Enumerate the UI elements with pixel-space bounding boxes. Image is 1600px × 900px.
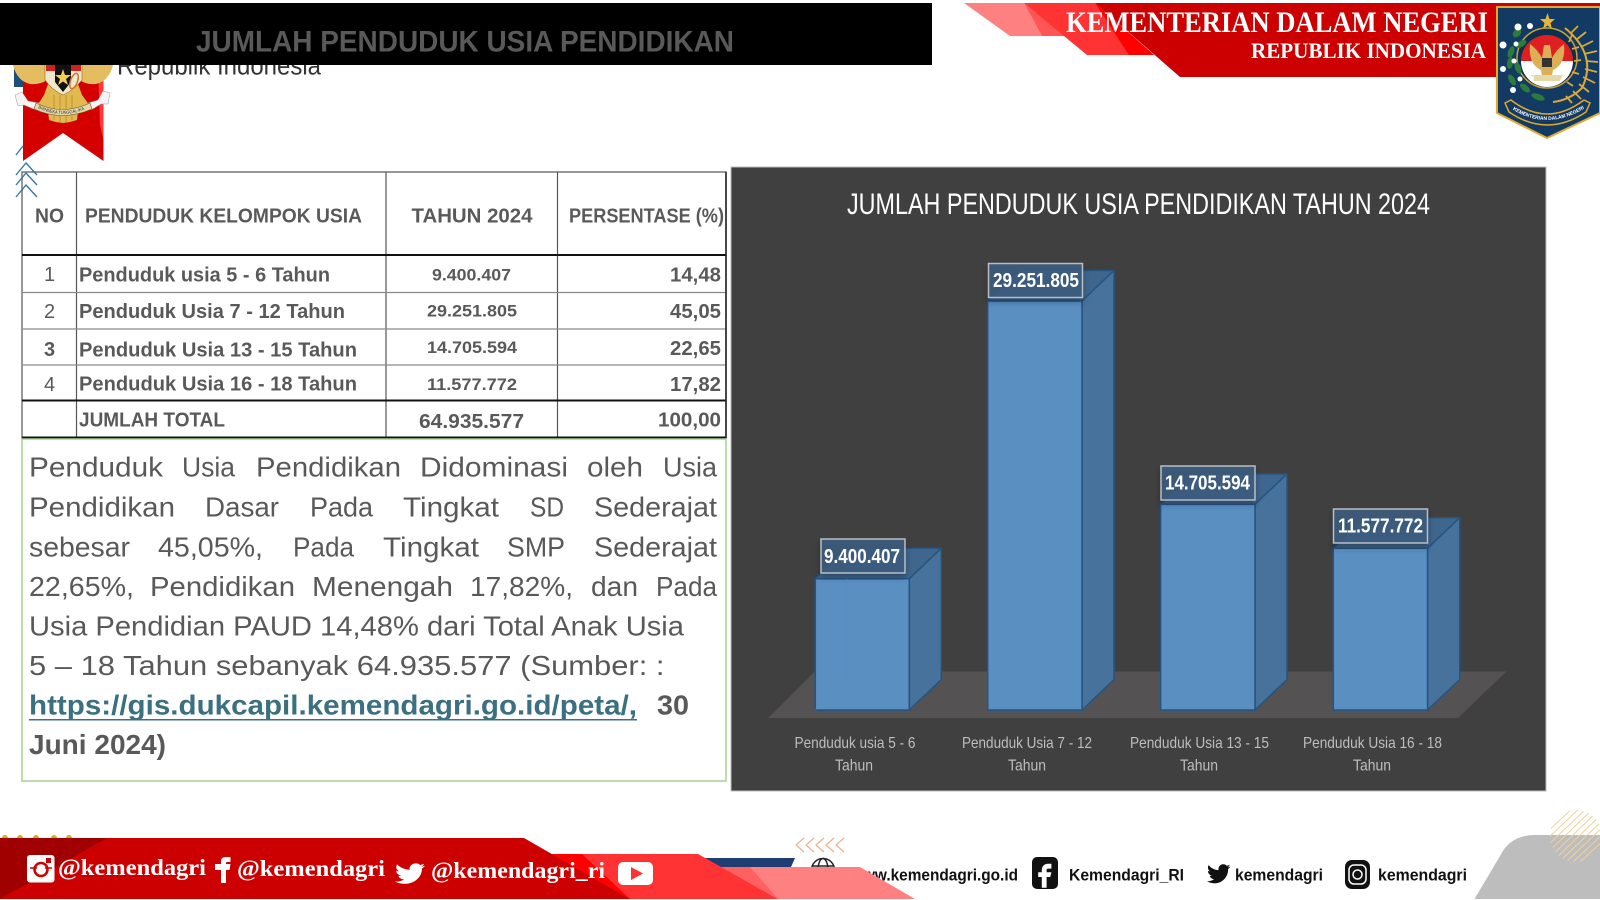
text line 4: Menengah — [312, 571, 453, 602]
text line 3: SMP — [507, 532, 565, 562]
text line 2: Sederajat — [594, 492, 717, 522]
axis label 1: Tahun — [835, 758, 873, 774]
text line 2: Dasar — [205, 492, 279, 522]
data label 2: 29.251.805 — [993, 270, 1079, 292]
table row 3: 14.705.594 — [427, 338, 518, 357]
icon: facebook dark — [1032, 857, 1058, 889]
text line 1: oleh — [587, 452, 643, 482]
table total row — [79, 410, 721, 433]
text line 1: Usia — [663, 452, 717, 482]
icon: globe — [812, 858, 834, 882]
table header row: PERSENTASE (%) — [569, 206, 724, 228]
website text: www.kemendagri.go.id — [850, 866, 1018, 884]
table header row: PENDUDUK KELOMPOK USIA — [85, 206, 362, 228]
table total row: 64.935.577 — [419, 411, 524, 433]
axis label 1 — [794, 735, 916, 774]
table row 4: 11.577.772 — [427, 375, 517, 394]
data label 1: 9.400.407 — [824, 546, 900, 568]
title: JUMLAH PENDUDUK USIA PENDIDIKAN — [196, 26, 734, 58]
text line 3: 45,05%, — [158, 532, 263, 562]
emblem: garuda on red ribbon: BHINNEKA TUNGGAL IKA — [38, 105, 84, 114]
table row 3 — [44, 338, 721, 362]
data table — [22, 172, 726, 438]
source date — [29, 690, 689, 760]
chart panel — [731, 167, 1546, 791]
text line 1: Usia — [182, 452, 235, 482]
icon: facebook white — [215, 857, 230, 883]
data label 3: 14.705.594 — [1165, 472, 1251, 494]
banner heading: KEMENTERIAN DALAM NEGERI — [1066, 6, 1488, 39]
table row 4: 17,82 — [670, 374, 721, 396]
table total row: 100,00 — [658, 410, 721, 432]
text line 4: Pendidikan — [150, 571, 295, 602]
table row 3: 22,65 — [670, 338, 721, 360]
emblem: ministry shield — [1496, 6, 1600, 140]
data label 3 — [1161, 466, 1255, 500]
text line 4 — [29, 571, 717, 602]
table row 4 — [44, 374, 721, 396]
bar 4 — [1333, 518, 1460, 710]
icon: instagram white — [27, 855, 54, 882]
text line 4: 22,65%, — [29, 571, 134, 602]
emblem: garuda on red ribbon — [13, 65, 113, 161]
handle: facebook: @kemendagri — [237, 856, 386, 882]
text line 5: Usia Pendidian PAUD 14,48% dari Total Anak Usia — [29, 610, 684, 642]
text line 3: Sederajat — [594, 532, 717, 562]
axis label 3: Tahun — [1180, 758, 1218, 774]
axis label 3 — [1130, 735, 1269, 774]
table row 2: 2 — [44, 301, 55, 323]
table row 2 — [44, 301, 721, 323]
icon: blue chevrons — [16, 146, 37, 197]
handle: instagram: @kemendagri — [58, 855, 207, 881]
table row 1: 1 — [44, 264, 55, 286]
table row 4: Penduduk Usia 16 - 18 Tahun — [79, 374, 357, 396]
text line 2: SD — [530, 492, 564, 522]
hatched circle decoration — [1550, 810, 1600, 862]
text line 2: Tingkat — [403, 492, 499, 522]
text line 2: Pendidikan — [29, 492, 175, 522]
text line 1 — [29, 452, 717, 482]
data label 4 — [1334, 509, 1428, 543]
footer red banner — [0, 835, 915, 899]
axis label 4: Penduduk Usia 16 - 18 — [1303, 735, 1442, 752]
table header row — [35, 206, 724, 228]
text line 4: dan — [591, 571, 638, 602]
table header row: NO — [35, 206, 64, 228]
banner subheading: REPUBLIK INDONESIA — [1251, 38, 1486, 63]
table row 1: 14,48 — [670, 264, 721, 286]
source date: Juni 2024) — [29, 729, 166, 760]
text line 2: Pada — [310, 492, 373, 522]
text line 3: Tingkat — [383, 532, 479, 562]
table row 1: 9.400.407 — [432, 266, 511, 284]
source link: https://gis.dukcapil.kemendagri.go.id/peta/, — [29, 690, 637, 720]
facebook handle: Kemendagri_RI — [1069, 866, 1184, 884]
data label 1 — [821, 539, 905, 573]
bar 2 — [988, 270, 1114, 710]
palm right — [1553, 26, 1598, 103]
icon: instagram dark — [1345, 860, 1370, 889]
axis label 4 — [1303, 735, 1442, 774]
bar 3 — [1161, 474, 1287, 710]
twitter handle: kemendagri — [1235, 866, 1323, 884]
text line 3: Pada — [293, 532, 354, 562]
axis label 3: Penduduk Usia 13 - 15 — [1130, 735, 1269, 752]
icon: twitter white — [395, 863, 425, 884]
text line 2 — [29, 492, 717, 522]
table total row: JUMLAH TOTAL — [79, 410, 225, 432]
chart floor — [768, 672, 1506, 718]
table row 4: 4 — [44, 374, 55, 396]
table row 1: Penduduk usia 5 - 6 Tahun — [79, 264, 330, 286]
orange chevrons — [796, 838, 844, 852]
text line 4: 17,82%, — [470, 571, 573, 602]
text line 1: Didominasi — [420, 452, 568, 482]
bar 1 — [815, 548, 941, 710]
table row 3: 3 — [44, 339, 55, 361]
table grid — [22, 172, 726, 438]
text line 3: sebesar — [29, 532, 130, 562]
table row 2: Penduduk Usia 7 - 12 Tahun — [79, 301, 345, 323]
icon: twitter dark — [1207, 864, 1231, 883]
table row 3: Penduduk Usia 13 - 15 Tahun — [79, 340, 357, 362]
narrative text panel — [22, 439, 726, 781]
handle: twitter: @kemendagri_ri — [431, 858, 606, 884]
chart title: JUMLAH PENDUDUK USIA PENDIDIKAN TAHUN 2024 — [847, 188, 1430, 221]
axis label 4: Tahun — [1353, 758, 1391, 774]
table row 2: 45,05 — [670, 301, 721, 323]
axis label 2: Penduduk Usia 7 - 12 — [962, 735, 1092, 752]
axis label 2 — [962, 735, 1092, 774]
text line 1: Pendidikan — [256, 452, 401, 482]
table row 2: 29.251.805 — [427, 302, 517, 320]
footer grey corner shape — [1474, 835, 1600, 899]
instagram handle: kemendagri — [1378, 866, 1467, 884]
table row 1 — [44, 264, 721, 286]
subtitle text behind title bar: Republik Indonesia — [117, 50, 321, 80]
text line 3 — [29, 532, 717, 562]
text line 4: Pada — [656, 571, 717, 602]
axis label 1: Penduduk usia 5 - 6 — [794, 735, 916, 752]
data label 4: 11.577.772 — [1338, 516, 1423, 538]
top right red banner — [964, 3, 1600, 77]
text line 1: Penduduk — [29, 452, 164, 482]
title bar — [0, 3, 932, 65]
text line 6: 5 – 18 Tahun sebanyak 64.935.577 (Sumber: : — [29, 650, 664, 681]
icon: youtube white — [618, 862, 653, 885]
emblem: ministry shield: KEMENTERIAN DALAM NEGERI — [1512, 106, 1584, 120]
data label 2 — [988, 264, 1082, 298]
axis label 2: Tahun — [1008, 758, 1046, 774]
wreath left — [1506, 27, 1546, 102]
table header row: TAHUN 2024 — [412, 206, 533, 228]
source date: 30 — [657, 690, 689, 720]
